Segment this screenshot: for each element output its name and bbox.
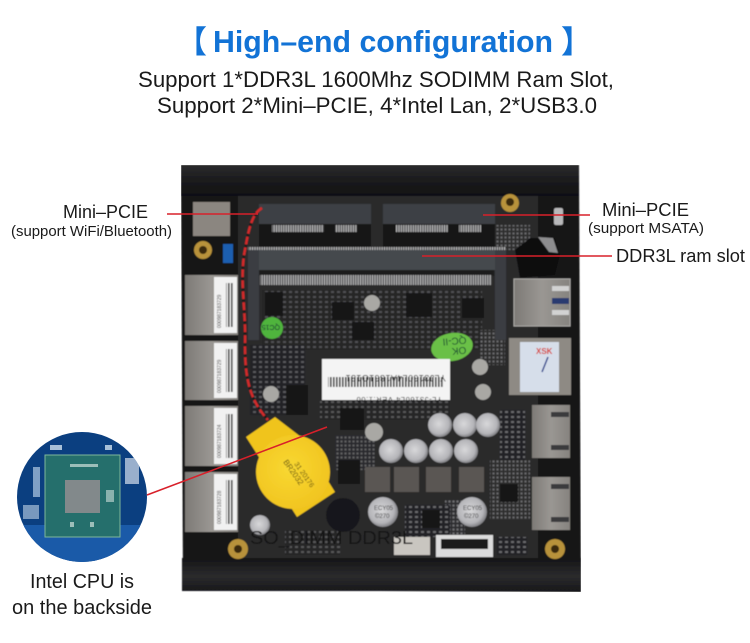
LAN port 3: [185, 406, 238, 466]
green QC sticker large: QC-II: [442, 334, 467, 347]
pointer line: CPU: [147, 427, 327, 495]
serial number sticker: YL-J3160L4 VER:1.00: [356, 395, 442, 404]
large capacitor right: ©270: [464, 513, 479, 520]
LAN port 3: 000987183724: [217, 424, 223, 458]
label: Mini-PCIE left: (support WiFi/Bluetooth): [11, 224, 172, 240]
label: DDR3L ram slot: DDR3L ram slot: [616, 246, 745, 266]
right white tab: [554, 208, 563, 225]
large capacitor right: [457, 497, 487, 527]
serial number sticker: YLJ3160L4A1861O131: [345, 373, 446, 383]
case bottom rail: [182, 558, 581, 591]
label: Intel CPU: on the backside: [12, 597, 152, 619]
large capacitor left: ECY05: [374, 506, 394, 512]
mini-PCIE slot left: [259, 204, 371, 248]
inductors: [365, 467, 484, 492]
serial number sticker: [322, 359, 450, 404]
subtitle: Support 1*DDR3L 1600Mhz SODIMM Ram Slot,: [138, 67, 614, 92]
LAN port 2: [185, 341, 238, 400]
pointer line: DDR3L slot: [422, 255, 612, 257]
large capacitor left: ©270: [375, 513, 390, 520]
board texture: [250, 225, 530, 555]
LAN port 4: [185, 472, 238, 532]
label: Mini-PCIE right: [588, 200, 704, 237]
mini PC board photo: [181, 165, 581, 592]
blue jumper: [223, 244, 233, 263]
top right clip: [515, 238, 560, 278]
silver latch: [538, 237, 558, 253]
small capacitor: [250, 515, 270, 535]
standoff nut bottom right: [545, 539, 565, 559]
large capacitor left: [368, 497, 398, 527]
green QC sticker small: QC15: [262, 323, 280, 330]
label: Mini-PCIE left: Mini–PCIE: [63, 202, 148, 222]
SO_DIMM overlay text: SO_DIMM DDR3L: [250, 527, 413, 549]
SATA connector: [436, 535, 493, 557]
gray connector top left: [193, 202, 230, 236]
screws: [263, 295, 491, 441]
chips: [265, 292, 518, 528]
circuit board: [238, 196, 538, 558]
LAN port 1: [185, 275, 238, 335]
case body: [181, 165, 581, 592]
label: Mini-PCIE right: (support MSATA): [588, 221, 704, 237]
green QC sticker large: OK: [451, 344, 467, 356]
label: Intel CPU: [12, 571, 152, 619]
yellow coin battery: 31 20176: [292, 461, 315, 489]
LAN port 1: 000987183729: [217, 294, 223, 328]
XSK labelled port: XSK: [536, 347, 553, 356]
mini-PCIE slot right: [383, 204, 495, 248]
standoff nut top right: [501, 194, 519, 212]
large capacitor right: ECY05: [463, 506, 483, 512]
case top rail: [181, 166, 579, 196]
title: 【: [176, 25, 207, 60]
title: High–end configuration: [213, 24, 553, 59]
green QC sticker large: [429, 330, 475, 364]
XSK labelled port: [509, 338, 571, 395]
LAN port 2: 000987183729: [217, 359, 223, 393]
yellow coin battery: [246, 417, 335, 517]
red and black wire: [243, 208, 268, 420]
white power connector: [394, 537, 430, 555]
subtitle: [138, 67, 614, 118]
LAN port 4: 000987183728: [217, 490, 223, 524]
standoff nut top left: [194, 241, 212, 259]
HDMI port 2: [532, 477, 570, 530]
header pins: [497, 537, 527, 555]
pointer line: Mini-PCIE right: [483, 214, 590, 216]
green QC sticker small: [261, 317, 283, 339]
pointer line: Mini-PCIE left: [167, 213, 258, 215]
USB3.0 port: [514, 279, 570, 326]
label: Mini-PCIE right: Mini–PCIE: [602, 200, 689, 220]
yellow coin battery: BR2032: [281, 458, 306, 487]
HDMI port 1: [532, 405, 570, 458]
standoff nut bottom left: [228, 539, 248, 559]
DDR3L ram slot: [248, 247, 506, 340]
subtitle: Support 2*Mini–PCIE, 4*Intel Lan, 2*USB3.0: [157, 93, 597, 118]
CPU inset circle: [15, 430, 150, 565]
title: 】: [561, 25, 592, 60]
buzzer: [326, 498, 360, 532]
capacitors row 1: [428, 413, 500, 437]
capacitors row 2: [379, 439, 478, 463]
label: Intel CPU: Intel CPU is: [30, 571, 134, 593]
label: Mini-PCIE left: [11, 202, 172, 240]
